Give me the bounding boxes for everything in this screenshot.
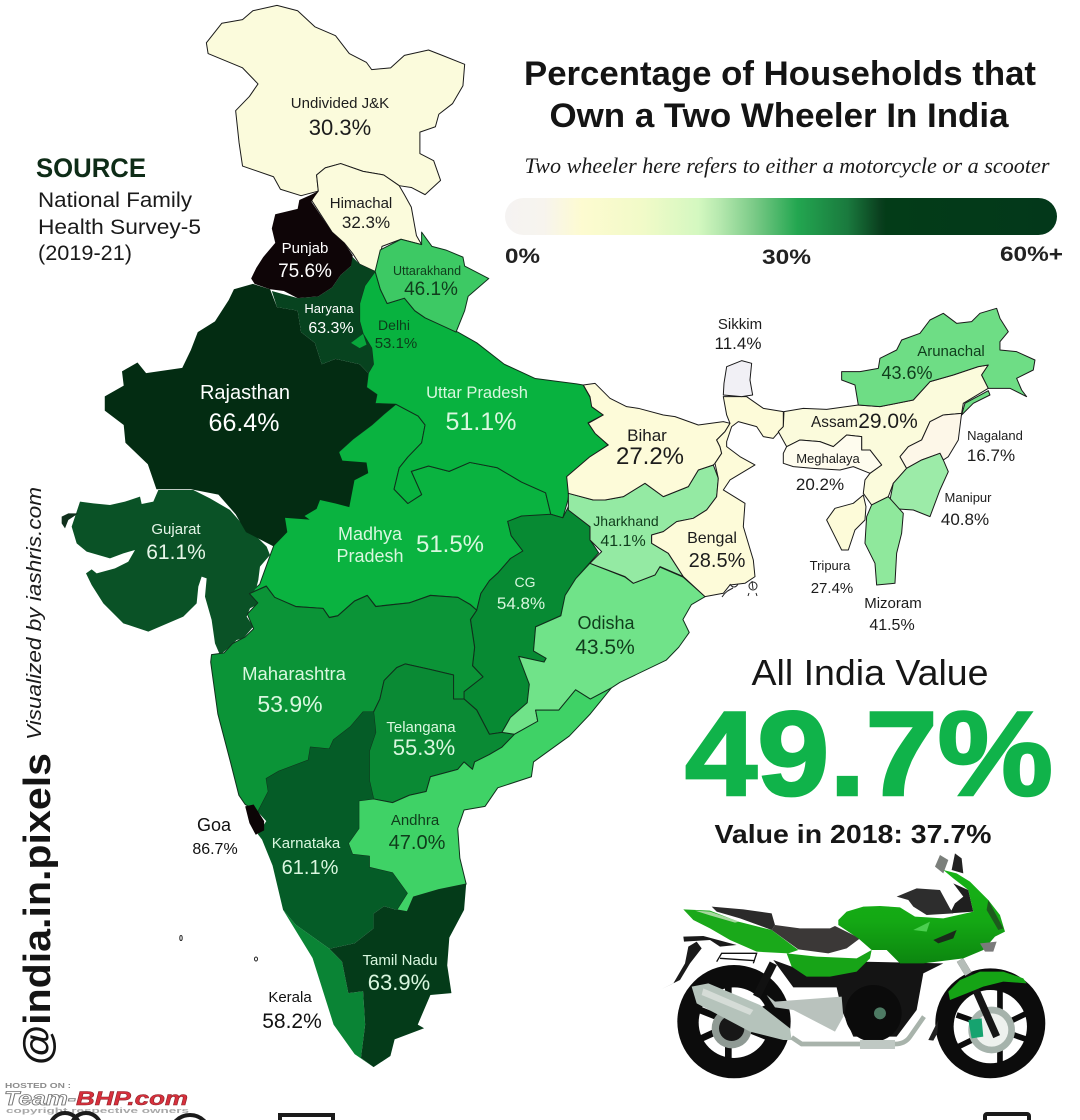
tank and front fairing bbox=[838, 870, 1005, 963]
source: National Family bbox=[38, 189, 193, 212]
state: Sikkim bbox=[715, 316, 762, 397]
source bbox=[36, 153, 201, 265]
state: Kerala: 58.2% bbox=[262, 1010, 322, 1033]
state: Arunachal: 43.6% bbox=[881, 363, 933, 383]
state: Mizoram: 41.5% bbox=[869, 617, 915, 634]
title bbox=[524, 55, 1036, 135]
state: Tamil Nadu: Tamil Nadu bbox=[362, 952, 438, 969]
state: Assam: 29.0% bbox=[858, 410, 918, 433]
footer: hosted on Team-BHP: HOSTED ON : bbox=[5, 1081, 71, 1090]
all India value bbox=[685, 652, 1053, 849]
state: Kerala bbox=[262, 910, 374, 1067]
seat bbox=[712, 907, 860, 953]
state: Manipur bbox=[888, 453, 992, 529]
state: Delhi: 53.1% bbox=[375, 335, 417, 352]
state: Bengal bbox=[652, 397, 783, 597]
state: Andhra bbox=[348, 688, 611, 912]
islands: Lakshadweep bbox=[180, 936, 258, 961]
title: Own a Two Wheeler In India bbox=[550, 97, 1010, 135]
front wheel bbox=[928, 968, 1045, 1078]
state: Goa: Goa bbox=[197, 815, 232, 835]
state: Tripura: Tripura bbox=[810, 558, 851, 573]
state: Karnataka: Karnataka bbox=[272, 835, 341, 852]
state: Undivided J&K: Undivided J&K bbox=[291, 95, 389, 112]
swing arm bbox=[767, 995, 843, 1032]
state: Chhattisgarh: CG bbox=[514, 574, 536, 590]
state: Delhi: Delhi bbox=[378, 317, 410, 333]
footer: hosted on Team-BHP bbox=[4, 1081, 189, 1115]
state: Rajasthan bbox=[105, 284, 396, 546]
state: Assam bbox=[778, 365, 988, 505]
state: Odisha: 43.5% bbox=[575, 636, 635, 659]
state: Arunachal: Arunachal bbox=[917, 343, 985, 360]
source: (2019-21) bbox=[38, 242, 132, 265]
state: Gujarat: Gujarat bbox=[151, 521, 201, 538]
state: Undivided J&K bbox=[206, 5, 465, 196]
state: Goa: 86.7% bbox=[192, 841, 238, 858]
state: Nagaland: 16.7% bbox=[967, 446, 1015, 465]
subtitle: Two wheeler here refers to either a motorcycle or a scooter bbox=[524, 153, 1050, 178]
front fender bbox=[948, 972, 1027, 1000]
state: Telangana: 55.3% bbox=[393, 735, 455, 760]
state: Karnataka: 61.1% bbox=[282, 857, 339, 879]
all India value: 49.7% bbox=[685, 687, 1053, 821]
source: Health Survey-5 bbox=[38, 216, 201, 239]
state: Chhattisgarh bbox=[464, 505, 599, 734]
state: Himachal: 32.3% bbox=[342, 213, 390, 232]
fork bbox=[960, 960, 997, 1037]
state: Gujarat bbox=[62, 490, 270, 655]
state: Bengal: 28.5% bbox=[689, 550, 746, 572]
state: Meghalaya bbox=[783, 435, 882, 494]
footer: hosted on Team-BHP: BHP.com bbox=[76, 1089, 188, 1110]
state: Andhra: Andhra bbox=[391, 812, 440, 829]
state: Chhattisgarh: 54.8% bbox=[497, 594, 545, 613]
state: Delhi bbox=[351, 317, 417, 352]
state: Uttar Pradesh: 51.1% bbox=[446, 408, 516, 436]
state: Uttarakhand: 46.1% bbox=[404, 279, 458, 300]
state: Uttarakhand bbox=[375, 232, 489, 332]
state: Tamil Nadu bbox=[329, 884, 466, 1067]
state: Bihar bbox=[567, 383, 730, 500]
state: Andhra: 47.0% bbox=[389, 832, 446, 854]
frame and engine bbox=[773, 960, 943, 1042]
side panel bbox=[787, 950, 872, 977]
state: Punjab: 75.6% bbox=[278, 261, 332, 282]
footer: hosted on Team-BHP: Team- bbox=[4, 1089, 76, 1110]
state: Nagaland: Nagaland bbox=[967, 428, 1023, 443]
state: Telangana: Telangana bbox=[386, 719, 456, 736]
state: Madhya Pradesh: Pradesh bbox=[336, 546, 404, 566]
state: Manipur: Manipur bbox=[945, 490, 992, 505]
state: Tripura bbox=[810, 495, 866, 597]
state: Himachal: Himachal bbox=[330, 195, 392, 212]
title: Percentage of Households that bbox=[524, 55, 1036, 93]
exhaust bbox=[692, 983, 924, 1049]
state: Goa bbox=[192, 804, 264, 858]
all India value: All India Value bbox=[752, 652, 988, 693]
state: Maharashtra: Maharashtra bbox=[242, 663, 347, 684]
state: Jharkhand bbox=[568, 465, 718, 583]
state: Nagaland bbox=[900, 413, 1023, 468]
rear wheel bbox=[677, 965, 791, 1078]
state: Karnataka bbox=[258, 712, 407, 949]
legend: colour scale bbox=[505, 198, 1063, 269]
state: Meghalaya: Meghalaya bbox=[796, 451, 861, 466]
state: Kerala: Kerala bbox=[268, 989, 312, 1006]
source: SOURCE bbox=[36, 153, 146, 183]
Sundarbans islands bbox=[722, 581, 757, 597]
state: Arunachal bbox=[842, 308, 1035, 415]
state: Tamil Nadu: 63.9% bbox=[368, 970, 430, 995]
all India value: Value in 2018: 37.7% bbox=[714, 819, 992, 849]
tail fairing bbox=[683, 909, 798, 953]
state: Uttar Pradesh: Uttar Pradesh bbox=[426, 384, 528, 402]
state: Punjab bbox=[251, 191, 353, 298]
rail and shock bbox=[717, 953, 773, 997]
state: Mizoram bbox=[864, 497, 922, 634]
cropped icons at bottom edge bbox=[50, 1113, 1029, 1120]
state: Odisha: Odisha bbox=[577, 613, 635, 633]
legend: colour scale: 60%+ bbox=[1000, 243, 1063, 266]
state: Maharashtra bbox=[211, 586, 483, 812]
state: Bihar: 27.2% bbox=[616, 443, 684, 470]
state: Haryana: Haryana bbox=[304, 301, 354, 316]
state: Bihar: Bihar bbox=[627, 426, 667, 445]
state: Manipur: 40.8% bbox=[941, 510, 989, 529]
state: Madhya Pradesh: 51.5% bbox=[416, 531, 484, 558]
state: Punjab: Punjab bbox=[282, 240, 328, 257]
state: Bengal: Bengal bbox=[687, 530, 737, 547]
state: Haryana: 63.3% bbox=[308, 320, 354, 337]
state: Jharkhand: Jharkhand bbox=[593, 513, 659, 529]
state: Tripura: 27.4% bbox=[811, 580, 853, 597]
motorcycle bbox=[661, 853, 1045, 1078]
windscreen and handlebar bbox=[897, 853, 973, 915]
state: Himachal bbox=[311, 164, 422, 271]
state: Telangana bbox=[369, 664, 515, 803]
credit: visualized by: Visualized by iashris.com bbox=[24, 487, 46, 740]
state: Rajasthan: 66.4% bbox=[209, 409, 279, 437]
legend: colour scale: 0% bbox=[505, 245, 540, 268]
state: Uttarakhand: Uttarakhand bbox=[393, 264, 461, 278]
state: Mizoram: Mizoram bbox=[864, 595, 922, 612]
state: Rajasthan: Rajasthan bbox=[200, 382, 290, 404]
footer: hosted on Team-BHP: copyright respective owners bbox=[6, 1106, 189, 1115]
state: Uttar Pradesh bbox=[360, 271, 608, 518]
state: Undivided J&K: 30.3% bbox=[309, 115, 371, 140]
legend: colour scale: 30% bbox=[762, 246, 811, 269]
state: Maharashtra: 53.9% bbox=[257, 691, 323, 717]
state: Sikkim: 11.4% bbox=[715, 334, 761, 353]
state: Jharkhand: 41.1% bbox=[600, 533, 646, 550]
state: Odisha bbox=[502, 563, 705, 734]
state: Madhya Pradesh: Madhya bbox=[338, 524, 403, 544]
state: Haryana bbox=[272, 255, 375, 373]
state: Meghalaya: 20.2% bbox=[796, 475, 844, 494]
credit: handle: @india.in.pixels bbox=[17, 753, 59, 1065]
tail bar and mudflap bbox=[661, 936, 737, 989]
state: Madhya Pradesh bbox=[249, 404, 563, 617]
state: Sikkim: Sikkim bbox=[718, 316, 762, 333]
state: Gujarat: 61.1% bbox=[146, 541, 206, 564]
state: Assam: Assam bbox=[811, 414, 858, 431]
